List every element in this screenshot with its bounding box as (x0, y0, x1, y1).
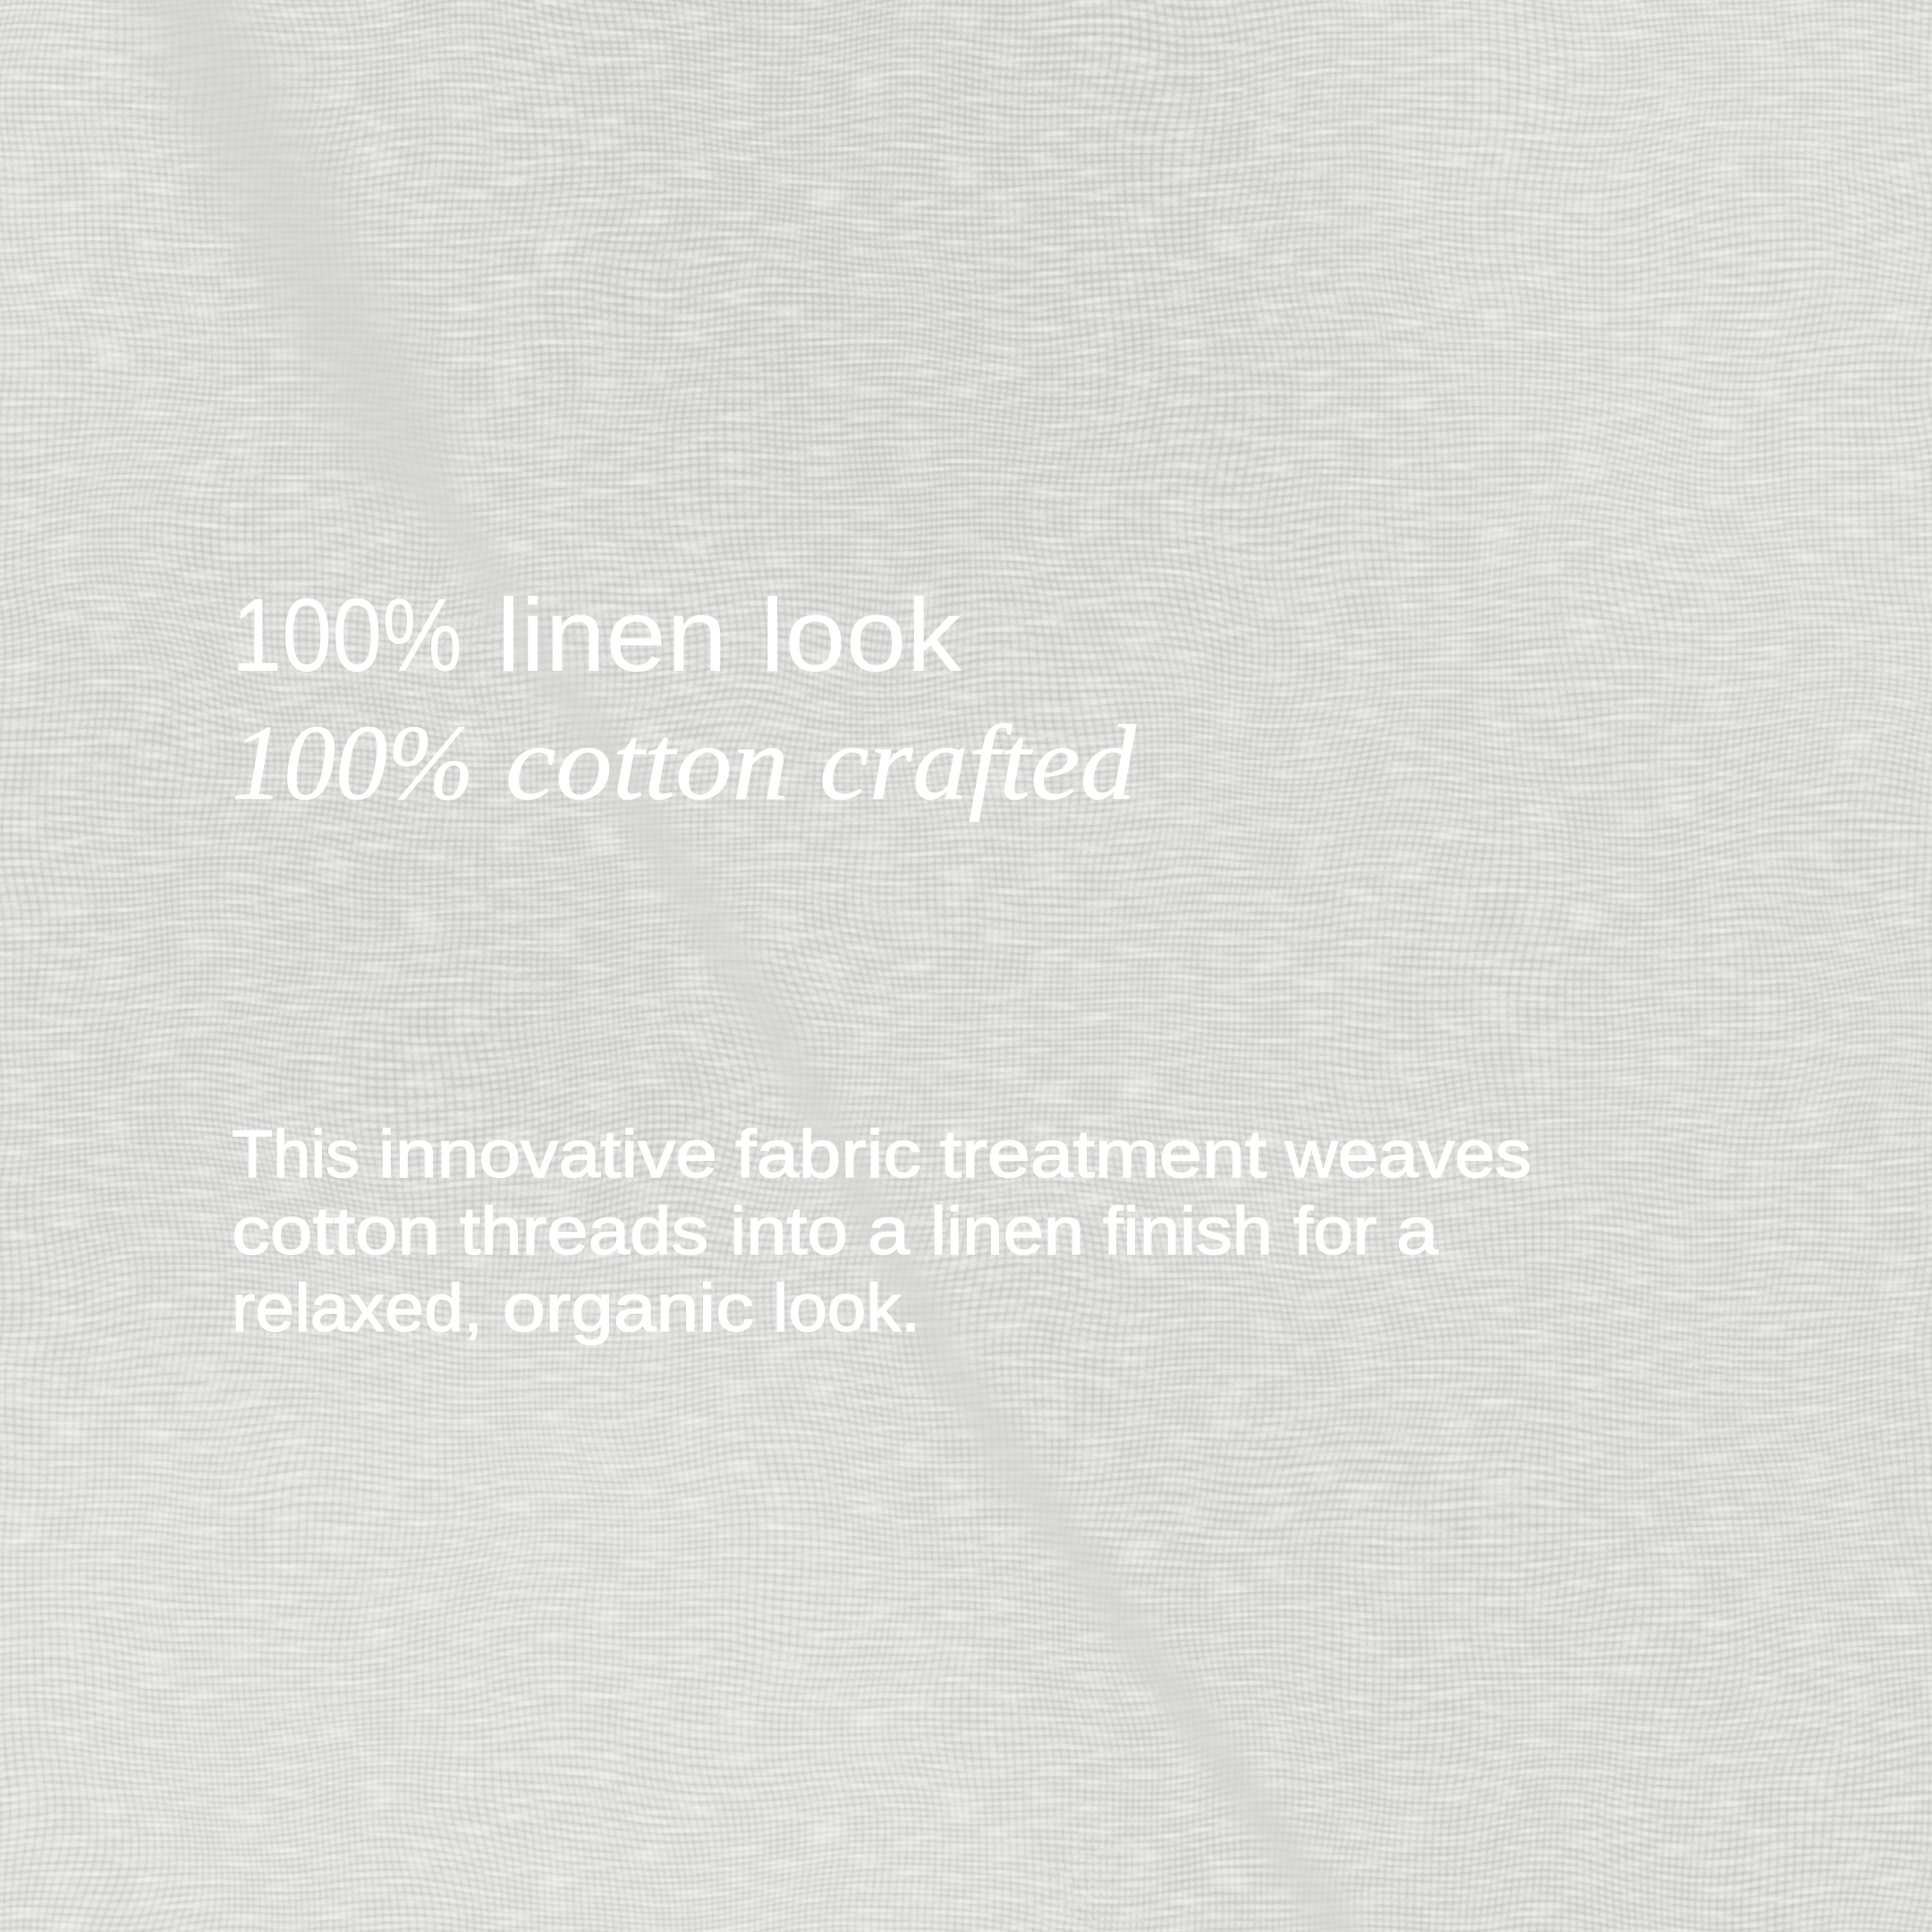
body line 3 (232, 1270, 920, 1345)
body line 1: fabric (735, 1116, 921, 1191)
heading line: 100% cotton crafted: 100% (232, 703, 474, 822)
heading line: 100% cotton crafted: cotton (505, 703, 789, 822)
body line 1 (232, 1116, 1531, 1191)
body line 2: a (1396, 1193, 1438, 1268)
body line 2: into (730, 1193, 848, 1268)
heading (232, 577, 1137, 822)
body line 3: relaxed, (232, 1270, 483, 1345)
soft fold ridge across the fabric (407, 456, 1355, 1932)
body line 1: This (232, 1116, 360, 1191)
heading line: 100% linen look (232, 577, 962, 693)
body line 2: cotton (232, 1193, 440, 1268)
body line 2 (232, 1193, 1438, 1268)
body line 1: weaves (1284, 1116, 1531, 1191)
soft out-of-focus band, top left (170, 0, 420, 483)
body line 3: look. (773, 1270, 920, 1345)
body line 1: innovative (378, 1116, 717, 1191)
heading line: 100% linen look: linen (496, 577, 727, 693)
body line 2: linen (930, 1193, 1084, 1268)
heading line: 100% cotton crafted (232, 703, 1137, 822)
body line 2: threads (460, 1193, 708, 1268)
body line 3: organic (503, 1270, 754, 1345)
heading line: 100% linen look: 100% (232, 577, 462, 693)
body line 1: treatment (940, 1116, 1267, 1191)
body line 2: finish (1103, 1193, 1273, 1268)
body line 2: for (1293, 1193, 1377, 1268)
heading line: 100% cotton crafted: crafted (819, 703, 1137, 822)
body line 2: a (868, 1193, 910, 1268)
body text (232, 1116, 1531, 1345)
heading line: 100% linen look: look (760, 577, 962, 693)
